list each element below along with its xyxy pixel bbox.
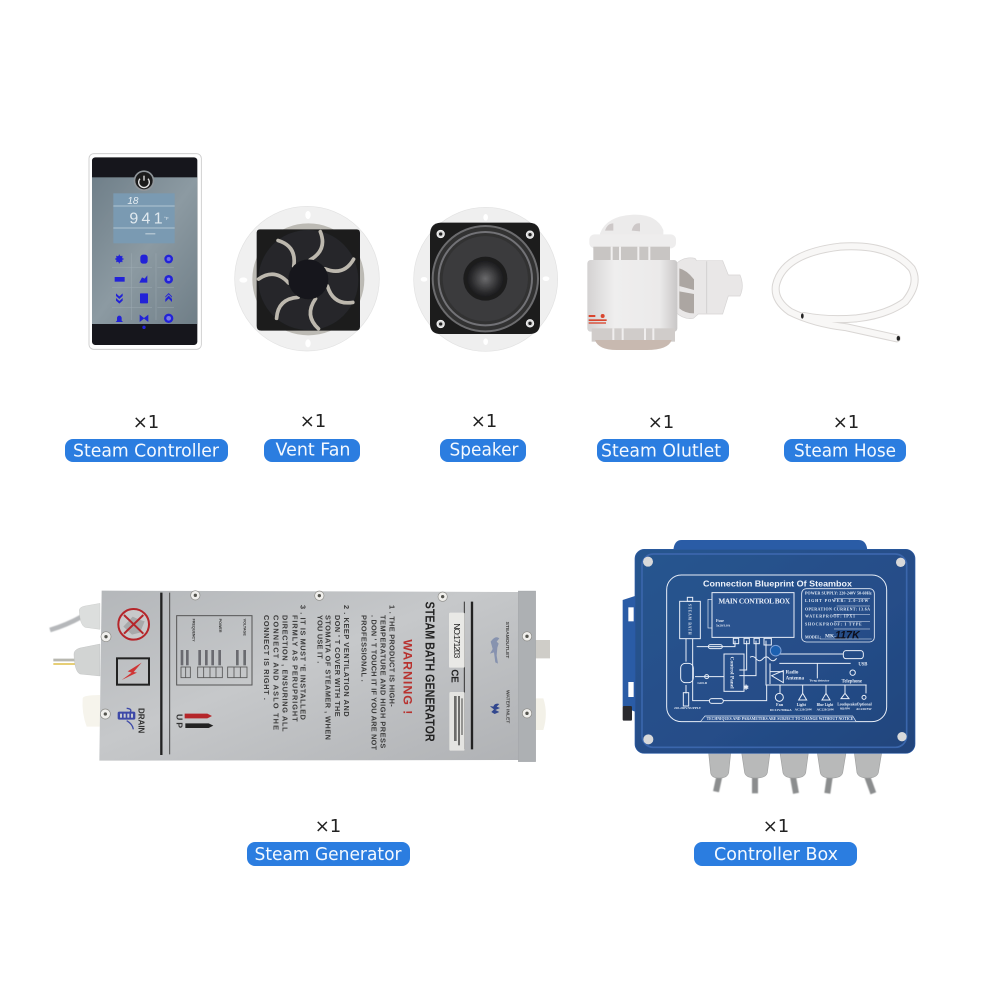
rating sticker xyxy=(449,692,465,751)
fan frame xyxy=(257,229,360,331)
device labels: Radio xyxy=(786,670,799,675)
label: Steam Controller: Steam Controller xyxy=(73,442,220,462)
product: controller box xyxy=(623,540,915,793)
quantity: ×1 vent fan: ×1 xyxy=(300,411,326,432)
steam outlet and water inlet labels: STEAMOUTLET xyxy=(504,622,510,658)
spec table xyxy=(177,616,252,685)
quantity: ×1 speaker: ×1 xyxy=(471,411,497,432)
device labels: Telephone xyxy=(842,680,862,685)
touch keypad icons xyxy=(112,253,174,329)
disclaimer strip: TECHNIQUES AND PARAMETERS ARE SUBJECT TO CHANGE WITHOUT NOTICE xyxy=(707,717,854,721)
specifications table: WATERPROOF: IPX1 xyxy=(805,613,855,618)
steam outlet and water inlet labels xyxy=(490,622,511,723)
warning instructions: PROFESSIONAL . xyxy=(359,615,368,682)
product: steam hose xyxy=(776,246,915,341)
product: vent fan xyxy=(235,206,379,351)
product: steam controller xyxy=(89,154,201,349)
device labels: AC220/5W xyxy=(856,707,872,711)
white mounting plate xyxy=(235,206,379,351)
specifications table: 117K xyxy=(835,630,861,642)
spec table: VOLTAGE xyxy=(242,619,246,636)
metal ring xyxy=(593,247,670,263)
main control box xyxy=(708,593,794,637)
warning instructions: FIRMLY AS PERUPRIGHT xyxy=(290,615,299,722)
specifications table: LIGHT POWER: 2.0-20W xyxy=(805,598,868,603)
generator housing xyxy=(99,591,520,761)
red warning print xyxy=(589,314,607,324)
wiring blueprint: Control Panel xyxy=(729,657,735,689)
icon: electric hazard sign xyxy=(117,658,149,685)
drain icon and label: DRAIN xyxy=(137,708,146,734)
screws xyxy=(100,591,532,719)
device labels: 8Ω/8W xyxy=(840,707,851,711)
fan blades xyxy=(258,232,355,330)
warning heading: WARNING ! xyxy=(401,639,415,714)
warning instructions xyxy=(262,605,396,751)
specifications table: MODEL: xyxy=(805,634,821,639)
base ring xyxy=(592,328,675,342)
device labels: Fan xyxy=(776,702,784,707)
speaker cone xyxy=(433,226,538,331)
LCD display: 18 xyxy=(127,196,139,207)
warning instructions: DON ' T COVER WITH THE xyxy=(333,615,342,717)
steam outlet and water inlet labels: WATER INLET xyxy=(505,690,511,723)
device labels: Optional xyxy=(857,701,873,706)
side connector xyxy=(675,258,742,319)
spec table: FREQUENCY xyxy=(192,619,196,642)
device labels: AC220/20W xyxy=(817,707,835,711)
warning instructions: CONNECT AND ASLO THE xyxy=(271,615,280,730)
vertical component labels: STEAM BATH xyxy=(688,604,692,635)
device labels: GOLD xyxy=(697,681,708,685)
device labels: DC12V/500mA xyxy=(770,708,792,712)
cable glands xyxy=(709,753,882,793)
label: Steam Hose: Steam Hose xyxy=(794,442,896,462)
specifications table: SHOCKPROOF: 1 TYPE xyxy=(805,621,862,626)
device labels: Antenna xyxy=(786,676,804,681)
serial number sticker xyxy=(449,613,465,668)
device labels: AC220/20W xyxy=(795,707,813,711)
device labels xyxy=(674,662,873,712)
quantity: ×1 steam outlet: ×1 xyxy=(648,412,674,433)
speaker frame xyxy=(430,223,540,334)
spec table: POWER xyxy=(218,619,222,633)
device labels: Light xyxy=(797,702,807,707)
specifications table: OPERATION CURRENT: 13.6A xyxy=(805,606,870,611)
wiring lines xyxy=(680,597,867,706)
icon: no touch sign xyxy=(118,609,149,640)
cables and glands xyxy=(50,603,550,730)
quantity: ×1 steam controller: ×1 xyxy=(133,412,159,433)
warning instructions: YOU USE IT . xyxy=(315,615,324,663)
specifications table: MK- xyxy=(825,633,836,639)
device labels: 220-240V/SUPPLY xyxy=(674,706,702,710)
specifications table xyxy=(802,589,874,642)
warning instructions: CONNECT IS RIGHT . xyxy=(262,615,271,700)
LCD display: °F xyxy=(164,216,169,221)
cylinder body xyxy=(587,260,677,332)
corner screws xyxy=(643,557,907,744)
main control box: Fuse xyxy=(716,618,724,623)
drain icon and label xyxy=(118,708,146,734)
warning instructions: 3 . IT IS MUST 'E INSTALLED xyxy=(299,605,308,720)
product: steam generator xyxy=(50,591,550,762)
quantity: ×1 steam generator: ×1 xyxy=(315,816,341,837)
UP arrows xyxy=(175,714,213,728)
blueprint title: Connection Blueprint Of Steambox xyxy=(703,578,852,588)
disclaimer strip xyxy=(701,716,856,721)
device labels: USB xyxy=(858,662,867,667)
LCD display: 941 xyxy=(129,211,163,228)
serial number sticker: NO:171203 xyxy=(452,623,462,659)
UP arrows: UP xyxy=(175,714,185,728)
label: Controller Box: Controller Box xyxy=(714,845,838,865)
device labels: Tweg detector xyxy=(809,678,830,682)
specifications table: POWER SUPPLY: 220-240V 50-60Hz xyxy=(805,590,872,595)
generator title: STEAM BATH GENERATOR xyxy=(423,602,438,742)
label: Vent Fan xyxy=(264,439,360,462)
warning instructions: 2 . KEEP VENTILATION AND xyxy=(342,605,351,717)
device labels: Blue Light xyxy=(817,703,834,707)
main control box: MAIN CONTROL BOX xyxy=(718,597,791,606)
screws xyxy=(437,230,534,328)
box body xyxy=(635,549,915,753)
label: Controller Box xyxy=(694,842,857,866)
LCD display xyxy=(113,193,175,243)
product: steam outlet xyxy=(587,215,742,350)
main control box: 5x20/3.0A xyxy=(716,624,731,628)
side mount tabs xyxy=(673,540,867,551)
icon: power button xyxy=(134,170,154,191)
CE mark: CE xyxy=(448,669,459,683)
quantity: ×1 steam hose: ×1 xyxy=(833,412,859,433)
quantity: ×1 controller box: ×1 xyxy=(763,816,789,837)
wiring blueprint xyxy=(667,575,887,722)
label: Steam OIutlet: Steam OIutlet xyxy=(601,442,721,462)
label: Speaker: Speaker xyxy=(450,440,519,460)
warning instructions: 1 . THE PRODUCT IS HIGH- xyxy=(387,605,396,707)
label: Vent Fan: Vent Fan xyxy=(276,440,350,460)
warning instructions: STOMATA OF STEAMER , WHEN xyxy=(324,615,333,740)
warning instructions: DIRECTION , ENSURING ALL xyxy=(280,615,289,732)
device labels: Loudspeaker xyxy=(837,702,858,706)
outlet head xyxy=(600,215,663,235)
wiring blueprint: ✱ xyxy=(743,683,749,691)
warning instructions: TEMPERATURE AND HIGH PRESS xyxy=(379,615,388,748)
product: speaker xyxy=(414,207,558,351)
label: Steam Generator: Steam Generator xyxy=(254,845,402,865)
warning instructions: . DON ' T TOUCH IT IF YOU ARE NOT xyxy=(369,615,378,751)
